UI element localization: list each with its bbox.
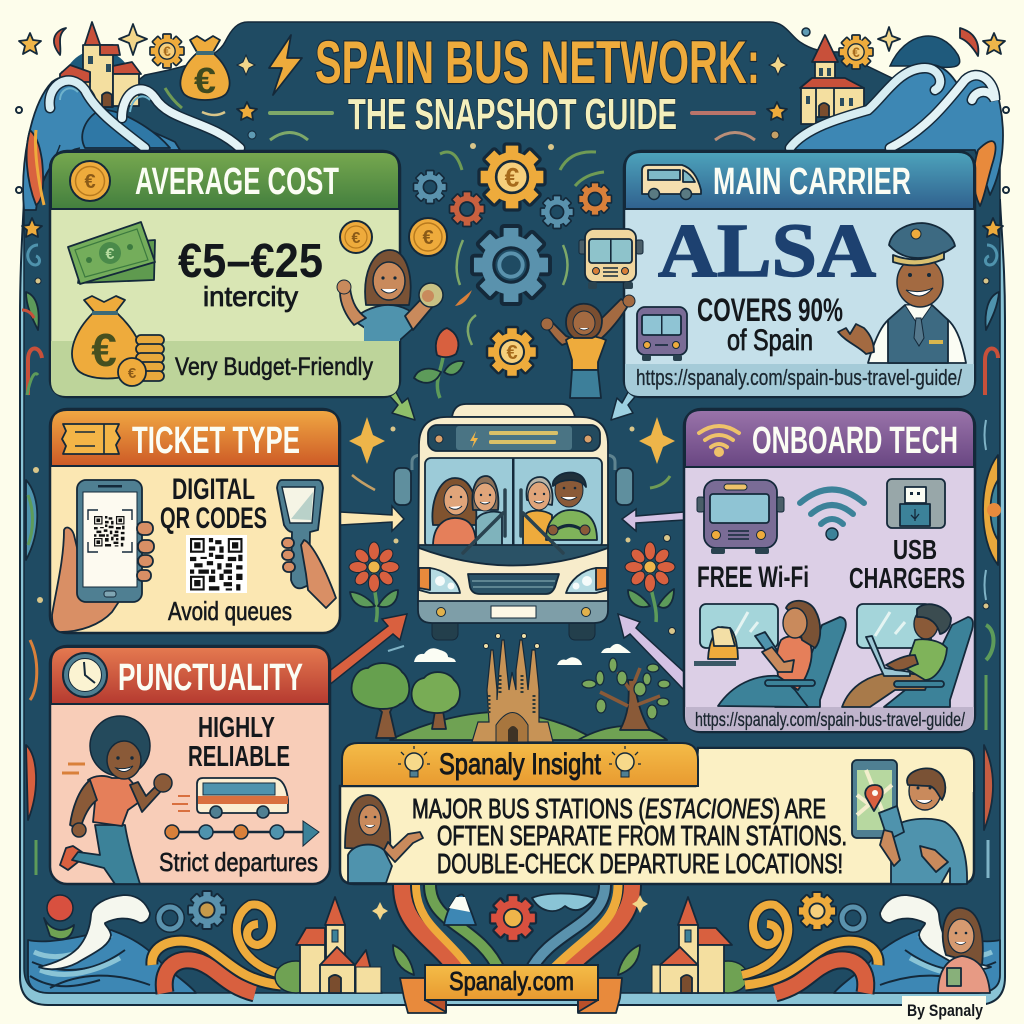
icon: purple bus with wifi xyxy=(697,480,784,554)
top-left corner illustration: village and waves xyxy=(16,22,240,210)
icon: orange tulip xyxy=(414,328,464,398)
icon: money bag, top: € xyxy=(194,60,216,101)
illustration: left flower xyxy=(349,542,399,622)
title: SPAIN BUS NETWORK: xyxy=(315,29,760,96)
icon: money bag, top xyxy=(180,36,230,101)
title ornaments xyxy=(165,35,787,140)
text: insight xyxy=(412,793,847,879)
icon: wifi xyxy=(800,490,864,540)
central cluster of gears and coins: € xyxy=(505,162,520,192)
label: budget: Very Budget-Friendly xyxy=(175,353,373,381)
label: highly reliable xyxy=(188,712,290,773)
label: highly reliable: HIGHLY xyxy=(198,712,275,744)
panel: spanaly insight xyxy=(340,743,974,884)
label: of Spain: of Spain xyxy=(727,324,813,357)
icon: timeline arrow xyxy=(165,821,319,846)
qr code xyxy=(186,535,247,593)
passengers xyxy=(432,473,597,546)
top-right corner illustration: village and waves xyxy=(790,27,1009,206)
heading: ticket type: TICKET TYPE xyxy=(132,420,300,462)
icon: usb xyxy=(887,479,945,528)
title xyxy=(315,29,760,139)
icon: coin in header xyxy=(70,161,110,201)
illustration: clouds xyxy=(388,644,631,665)
icon: gear with euro, top left xyxy=(150,34,184,68)
icon: coach in header xyxy=(642,165,701,200)
text: insight: DOUBLE-CHECK DEPARTURE LOCATIONS! xyxy=(437,848,843,879)
icon: coin in body: € xyxy=(352,230,361,247)
bottom left illustration: rose, wave and swirl xyxy=(28,891,285,993)
illustration: man with laptop on seat xyxy=(842,604,973,707)
icon: bottom centre flower xyxy=(372,894,648,975)
label: digital qr codes: QR CODES xyxy=(160,502,267,535)
credit: by spanaly: By Spanaly xyxy=(907,1001,983,1020)
label: avoid queues: Avoid queues xyxy=(168,596,292,626)
label: usb chargers xyxy=(849,534,965,595)
icon: coach xyxy=(172,778,288,818)
panel: average cost xyxy=(50,151,443,397)
icon: gear with euro, top right: € xyxy=(852,45,860,60)
illustration: waving child xyxy=(541,295,635,398)
icon: hand holding phone xyxy=(52,480,154,632)
label: usb chargers: USB xyxy=(893,534,937,565)
label: strict departures: Strict departures xyxy=(159,847,318,877)
illustration: driver xyxy=(838,223,966,363)
illustration: woman pointing xyxy=(345,795,423,883)
central cluster of gears and coins xyxy=(409,143,612,377)
left side ornaments xyxy=(22,218,43,875)
right side ornaments xyxy=(983,218,1003,878)
icon: coin in body xyxy=(340,221,372,253)
icon: wifi header xyxy=(699,426,739,455)
heading: average cost: AVERAGE COST xyxy=(135,161,339,203)
illustration: hill and trees xyxy=(352,658,670,740)
panel: ticket type xyxy=(50,409,404,633)
logo: ALSA: ALSA xyxy=(658,209,876,293)
icon: ticket xyxy=(62,424,120,454)
bottom centre-right house xyxy=(652,897,748,993)
icon: hand with scanner xyxy=(277,480,336,608)
illustration: woman with phone on seat xyxy=(694,601,846,707)
heading: punctuality: PUNCTUALITY xyxy=(118,657,303,699)
icon: clock xyxy=(63,653,107,697)
icon: bulb right xyxy=(609,746,641,777)
illustration: central bus xyxy=(394,404,633,640)
icon: gear with euro, top left: € xyxy=(163,44,171,59)
text: insight: MAJOR BUS STATIONS (ESTACIONES) ARE xyxy=(412,793,826,824)
icon: money bag and coins: € xyxy=(128,365,137,382)
label: usb chargers: CHARGERS xyxy=(849,563,965,595)
illustration: running woman xyxy=(60,716,172,884)
illustration: man with phone and map xyxy=(852,760,967,884)
heading: main carrier: MAIN CARRIER xyxy=(713,161,911,203)
arrow: average cost to bus xyxy=(380,385,415,420)
text: insight: OFTEN SEPARATE FROM TRAIN STATIONS. xyxy=(437,820,847,851)
heading: spanaly insight: Spanaly Insight xyxy=(439,748,602,781)
text: spanaly.com: Spanaly.com xyxy=(449,966,574,996)
icon: money bag and coins xyxy=(72,296,164,386)
bottom centre-left house xyxy=(275,897,382,993)
illustration: sagrada familia xyxy=(472,634,553,742)
title: THE SNAPSHOT GUIDE xyxy=(348,90,677,139)
arrow: main carrier to bus xyxy=(611,385,645,420)
icon: coin in header: € xyxy=(84,171,96,193)
label: digital qr codes: DIGITAL xyxy=(172,473,255,506)
icon: purple bus xyxy=(637,307,687,361)
illustration: woman reading, bottom right xyxy=(938,908,990,993)
icon: money bag and coins: € xyxy=(91,324,117,376)
icon: bulb left xyxy=(398,746,430,777)
panel: main carrier xyxy=(624,151,975,397)
bottom centre ribbons and flower xyxy=(402,885,632,972)
label: highly reliable: RELIABLE xyxy=(188,741,290,773)
central cluster of gears and coins: € xyxy=(506,342,518,364)
icon: left sparkle and dots xyxy=(349,417,676,634)
panel: onboard tech xyxy=(618,409,975,732)
credit: by spanaly xyxy=(902,996,986,1024)
icon: gear with euro, top right xyxy=(839,35,873,69)
label: covers 90%: COVERS 90% xyxy=(697,292,843,328)
icon: banknotes: € xyxy=(106,246,115,263)
bottom right illustration: swirl, gear and wave xyxy=(742,892,1000,993)
panel: punctuality xyxy=(50,614,407,884)
icon: small gold bus xyxy=(579,229,643,289)
price: €5–€25 xyxy=(178,235,323,288)
icon: banknotes xyxy=(68,222,155,284)
illustration: right flower xyxy=(625,542,675,622)
illustration: happy woman xyxy=(337,250,443,341)
label: intercity: intercity xyxy=(203,281,298,312)
label: digital qr codes xyxy=(160,473,267,535)
central cluster of gears and coins: € xyxy=(422,227,434,249)
label: free wi-fi: FREE Wi-Fi xyxy=(697,561,809,594)
brand banner xyxy=(400,965,622,1013)
